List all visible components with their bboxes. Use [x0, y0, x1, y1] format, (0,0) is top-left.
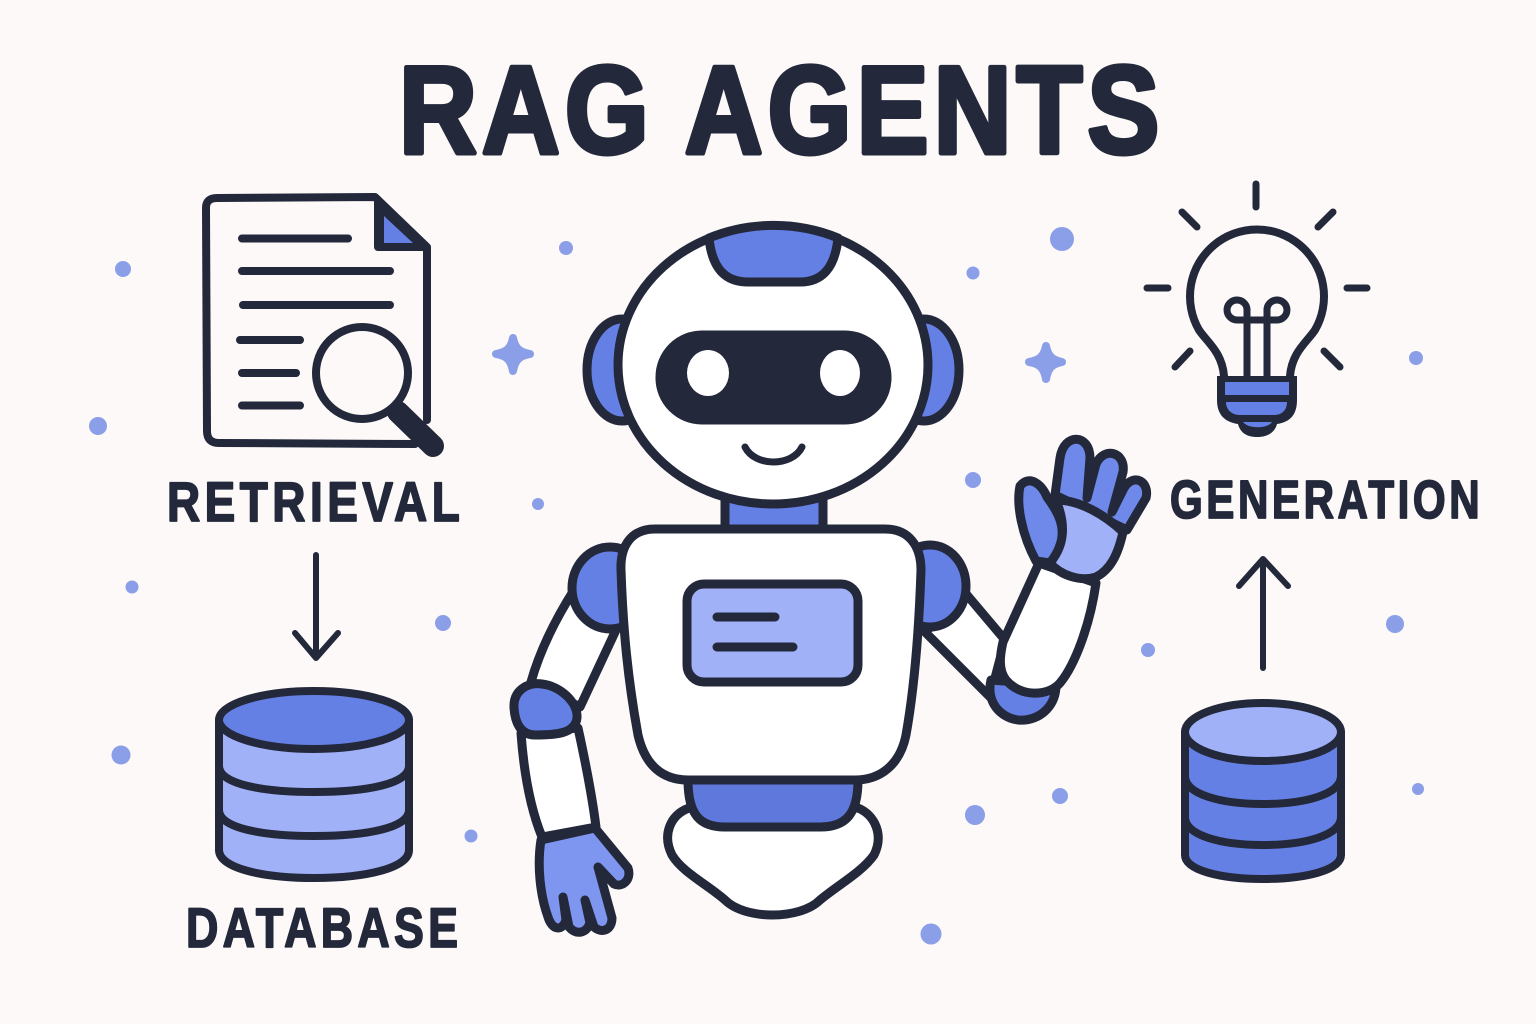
- label: retrieval: RETRIEVAL: [167, 471, 460, 533]
- robot ears: [587, 319, 959, 421]
- robot hover base: [668, 808, 878, 915]
- robot visor: [660, 335, 887, 420]
- icon: database left: [219, 691, 409, 878]
- label: generation: GENERATION: [1170, 470, 1480, 530]
- robot eyes: [687, 350, 860, 396]
- bulb filament: [1227, 300, 1287, 376]
- icon: database right: [1185, 703, 1341, 879]
- label: database: DATABASE: [186, 896, 458, 959]
- bulb rays: [1147, 184, 1367, 367]
- title: RAG AGENTS: [399, 41, 1159, 180]
- icon: light bulb: [1147, 184, 1367, 437]
- robot left arm: [514, 590, 629, 932]
- robot smile: [745, 447, 802, 462]
- robot right arm: [925, 439, 1147, 720]
- robot shoulders: [572, 545, 966, 629]
- robot torso: [621, 529, 921, 780]
- robot head cap: [709, 225, 838, 282]
- bulb glass: [1190, 229, 1324, 376]
- robot: [514, 225, 1147, 932]
- robot waist: [688, 780, 858, 827]
- robot head: [618, 226, 928, 504]
- icon: document with magnifier: [206, 197, 433, 446]
- background dots and sparkles: [89, 227, 1424, 944]
- arrow: database to generation: [1239, 559, 1288, 668]
- bulb base: [1217, 376, 1297, 437]
- robot neck: [725, 495, 823, 535]
- robot chest panel: [687, 584, 858, 682]
- arrow: retrieval to database: [295, 555, 338, 658]
